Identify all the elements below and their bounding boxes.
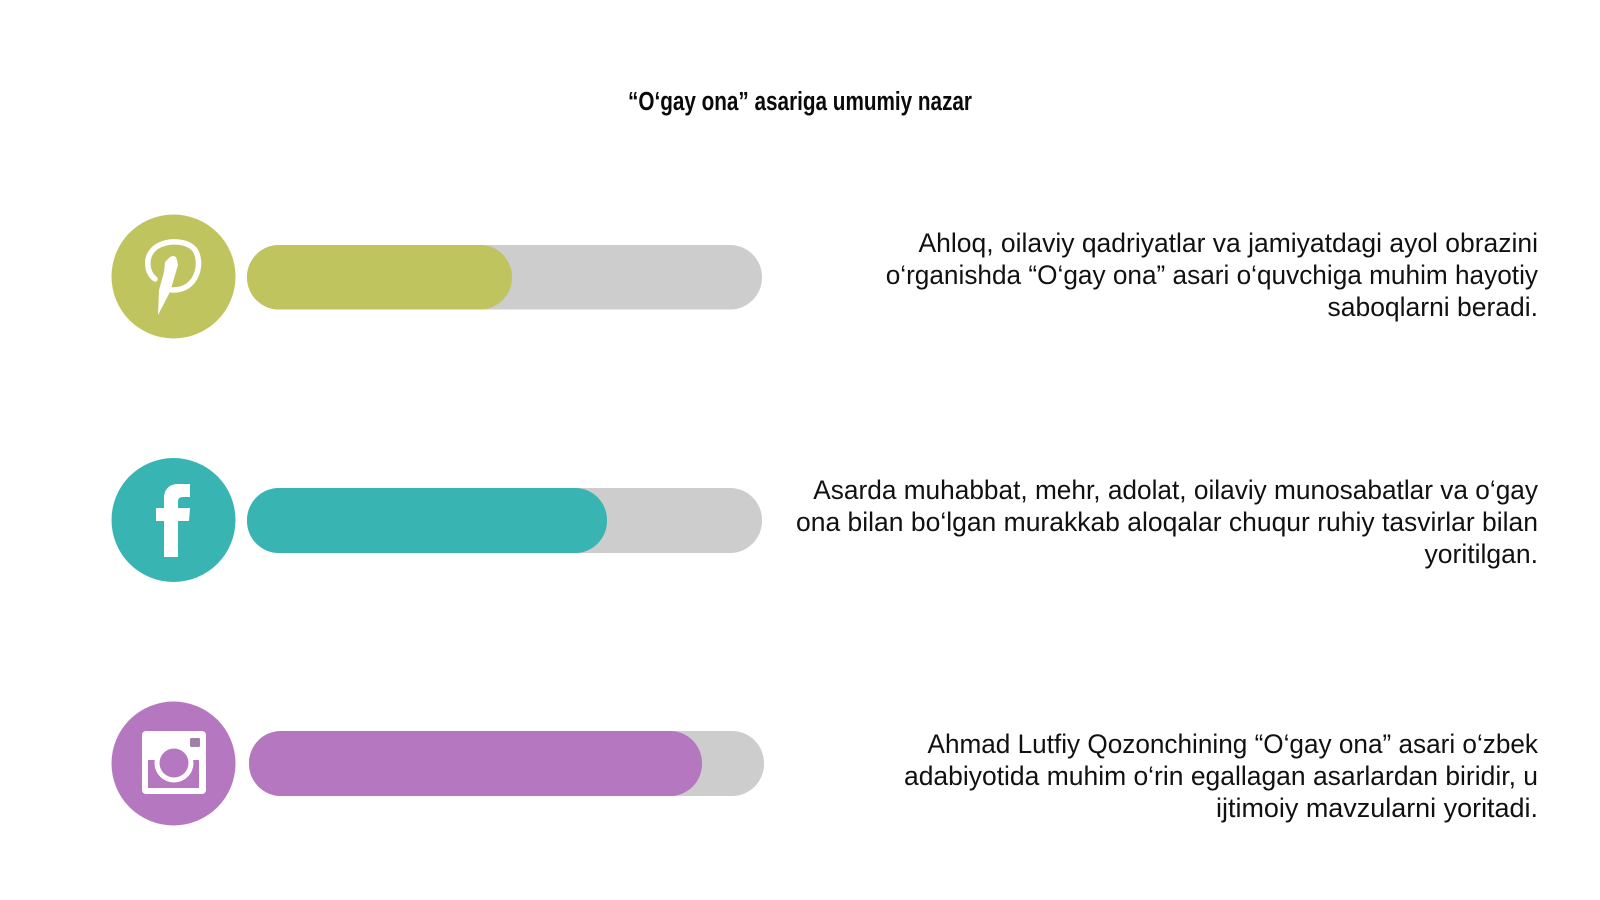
text block: row 2 xyxy=(796,475,1539,569)
text block: row 1: Ahloq, oilaviy qadriyatlar va jamiyatdagi ayol obrazini xyxy=(918,228,1538,258)
text block: row 3: adabiyotida muhim o‘rin egallagan asarlardan biridir, u xyxy=(904,761,1538,791)
text block: row 3: Ahmad Lutfiy Qozonchining “O‘gay ona” asari o‘zbek xyxy=(928,729,1539,759)
text block: row 3: ijtimoiy mavzularni yoritadi. xyxy=(1216,793,1538,823)
text block: row 2: Asarda muhabbat, mehr, adolat, oilaviy munosabatlar va o‘gay xyxy=(813,475,1539,505)
progress bar: facebook xyxy=(247,488,762,553)
text block: row 2: yoritilgan. xyxy=(1424,539,1538,569)
panel: row 3 instagram xyxy=(112,702,1539,826)
title: “O‘gay ona” asariga umumiy nazar xyxy=(628,88,972,116)
text block: row 1 xyxy=(886,228,1539,322)
text block: row 1: saboqlarni beradi. xyxy=(1328,292,1538,322)
text block: row 2: ona bilan bo‘lgan murakkab aloqalar chuqur ruhiy tasvirlar bilan xyxy=(796,507,1538,537)
text block: row 3 xyxy=(904,729,1539,823)
progress bar: pinterest xyxy=(247,245,762,310)
panel: row 1 pinterest xyxy=(112,214,1539,338)
icon: pinterest xyxy=(112,214,236,338)
text block: row 1: o‘rganishda “O‘gay ona” asari o‘quvchiga muhim hayotiy xyxy=(886,260,1539,290)
panel: row 2 facebook xyxy=(112,458,1539,582)
icon: facebook xyxy=(112,458,236,582)
icon: instagram xyxy=(112,702,236,826)
progress bar: instagram xyxy=(249,731,764,796)
